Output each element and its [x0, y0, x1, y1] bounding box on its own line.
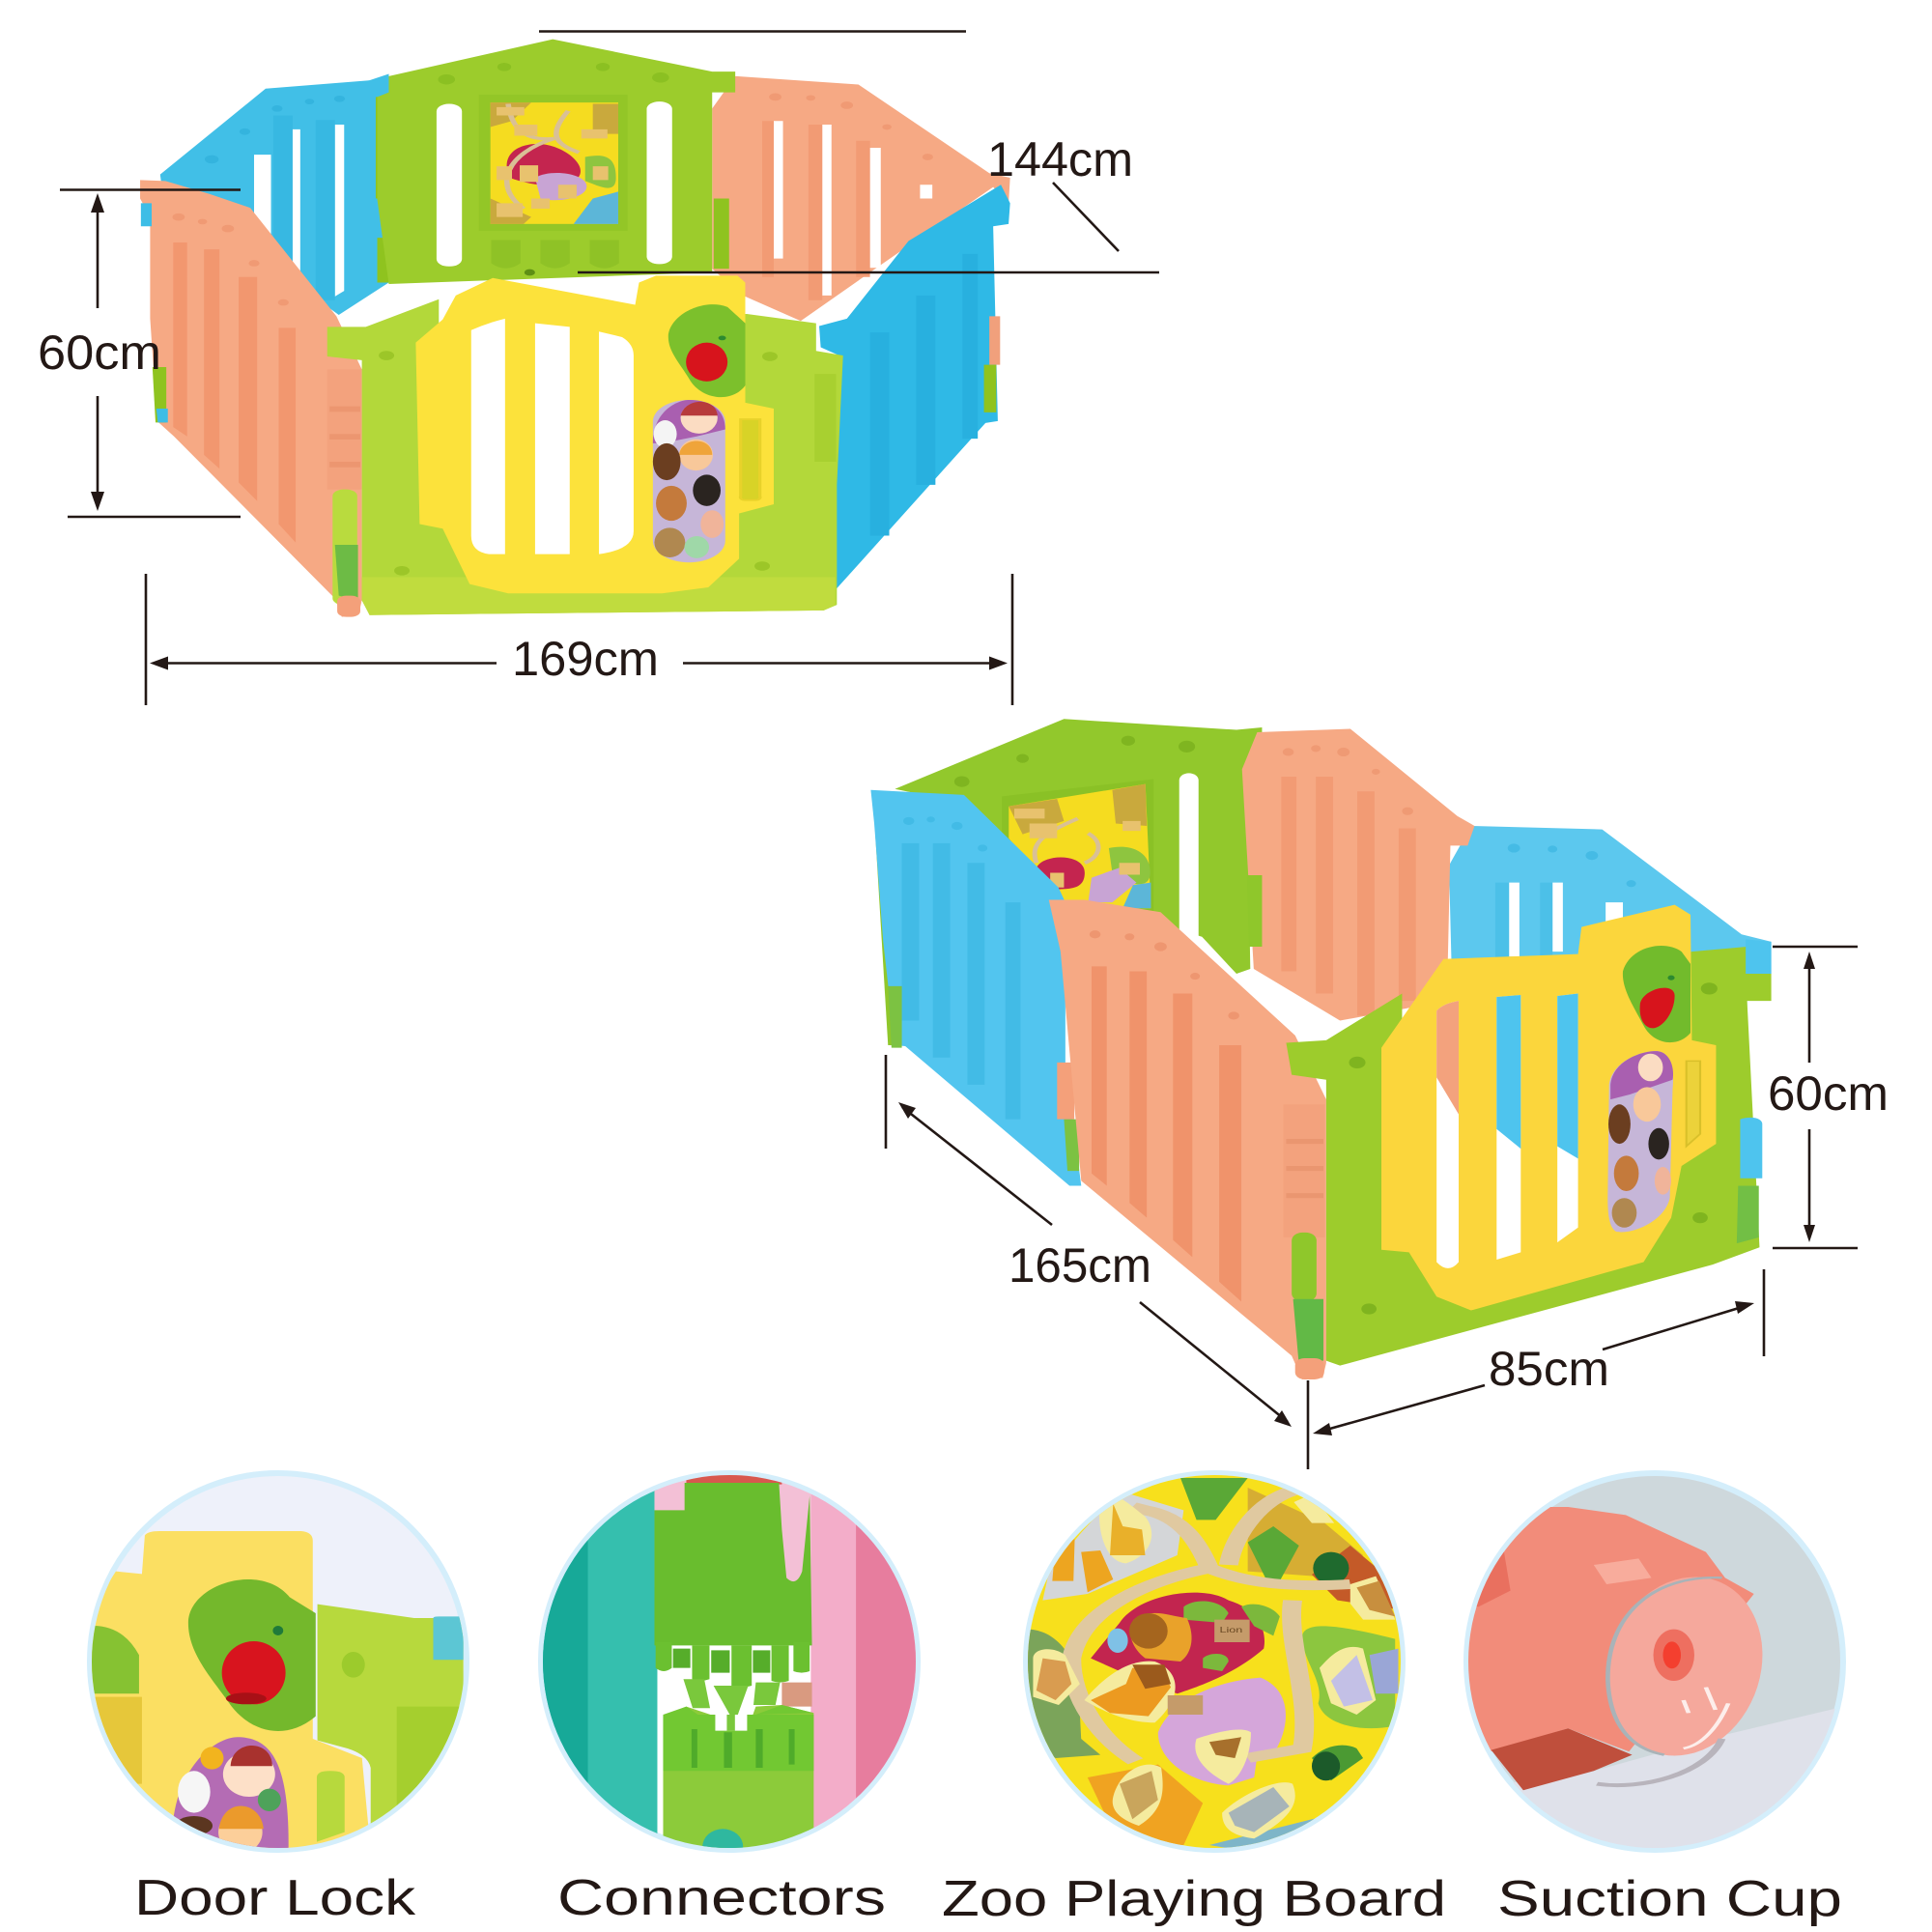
dimension: 85cm width — [1308, 1269, 1764, 1469]
back green panel with board — [378, 40, 735, 284]
detail circle: suction cup — [1460, 1473, 1844, 1855]
dimension: 169cm width — [146, 574, 1012, 705]
dimension: 60cm height: 60cm — [38, 326, 161, 380]
dimension: 165cm length — [886, 1055, 1292, 1427]
sticker: children and balls — [653, 400, 725, 562]
detail circle: zoo playing board — [1023, 1468, 1414, 1858]
zoo board picture — [1009, 784, 1151, 908]
yellow door — [1381, 905, 1716, 1311]
dimension: 60cm height — [38, 189, 241, 517]
front left orange panel — [140, 180, 362, 617]
sticker: children and balls — [1607, 1051, 1673, 1232]
dimension: 144cm — [539, 31, 1159, 272]
back right blue panel — [1449, 826, 1772, 1158]
front left blue panel — [870, 790, 1081, 1185]
dimension: 60cm height right: 60cm — [1768, 1066, 1889, 1121]
back orange panel — [1242, 728, 1474, 1021]
label: Connectors: Connectors — [557, 1870, 886, 1926]
playpen: rectangle layout — [870, 719, 1772, 1379]
dimension: 60cm height right — [1768, 947, 1889, 1248]
detail circle: zoo playing board: Lion — [1219, 1625, 1242, 1634]
front green panel — [1286, 905, 1772, 1366]
dimension: 144cm: 144cm — [987, 132, 1133, 186]
yellow door — [415, 275, 774, 593]
dimension: 85cm width: 85cm — [1489, 1342, 1609, 1396]
label: Door Lock: Door Lock — [134, 1870, 416, 1926]
front orange panel — [1049, 900, 1326, 1379]
label: Zoo Playing Board: Zoo Playing Board — [942, 1871, 1446, 1927]
back right orange panel — [712, 76, 1010, 321]
front right blue panel — [809, 185, 1010, 596]
front green panel — [327, 275, 843, 615]
door lock — [668, 304, 745, 397]
label: Suction Cup: Suction Cup — [1497, 1871, 1842, 1927]
dimension: 165cm length: 165cm — [1009, 1238, 1151, 1293]
back left blue panel — [160, 73, 392, 315]
door lock — [1623, 946, 1690, 1042]
detail circle: door lock — [87, 1473, 467, 1853]
playpen: hexagon layout — [140, 40, 1010, 617]
detail circle: connectors — [539, 1468, 926, 1864]
zoo board picture — [491, 102, 618, 224]
back green panel with board — [895, 719, 1262, 974]
dimension: 169cm width: 169cm — [512, 632, 659, 686]
